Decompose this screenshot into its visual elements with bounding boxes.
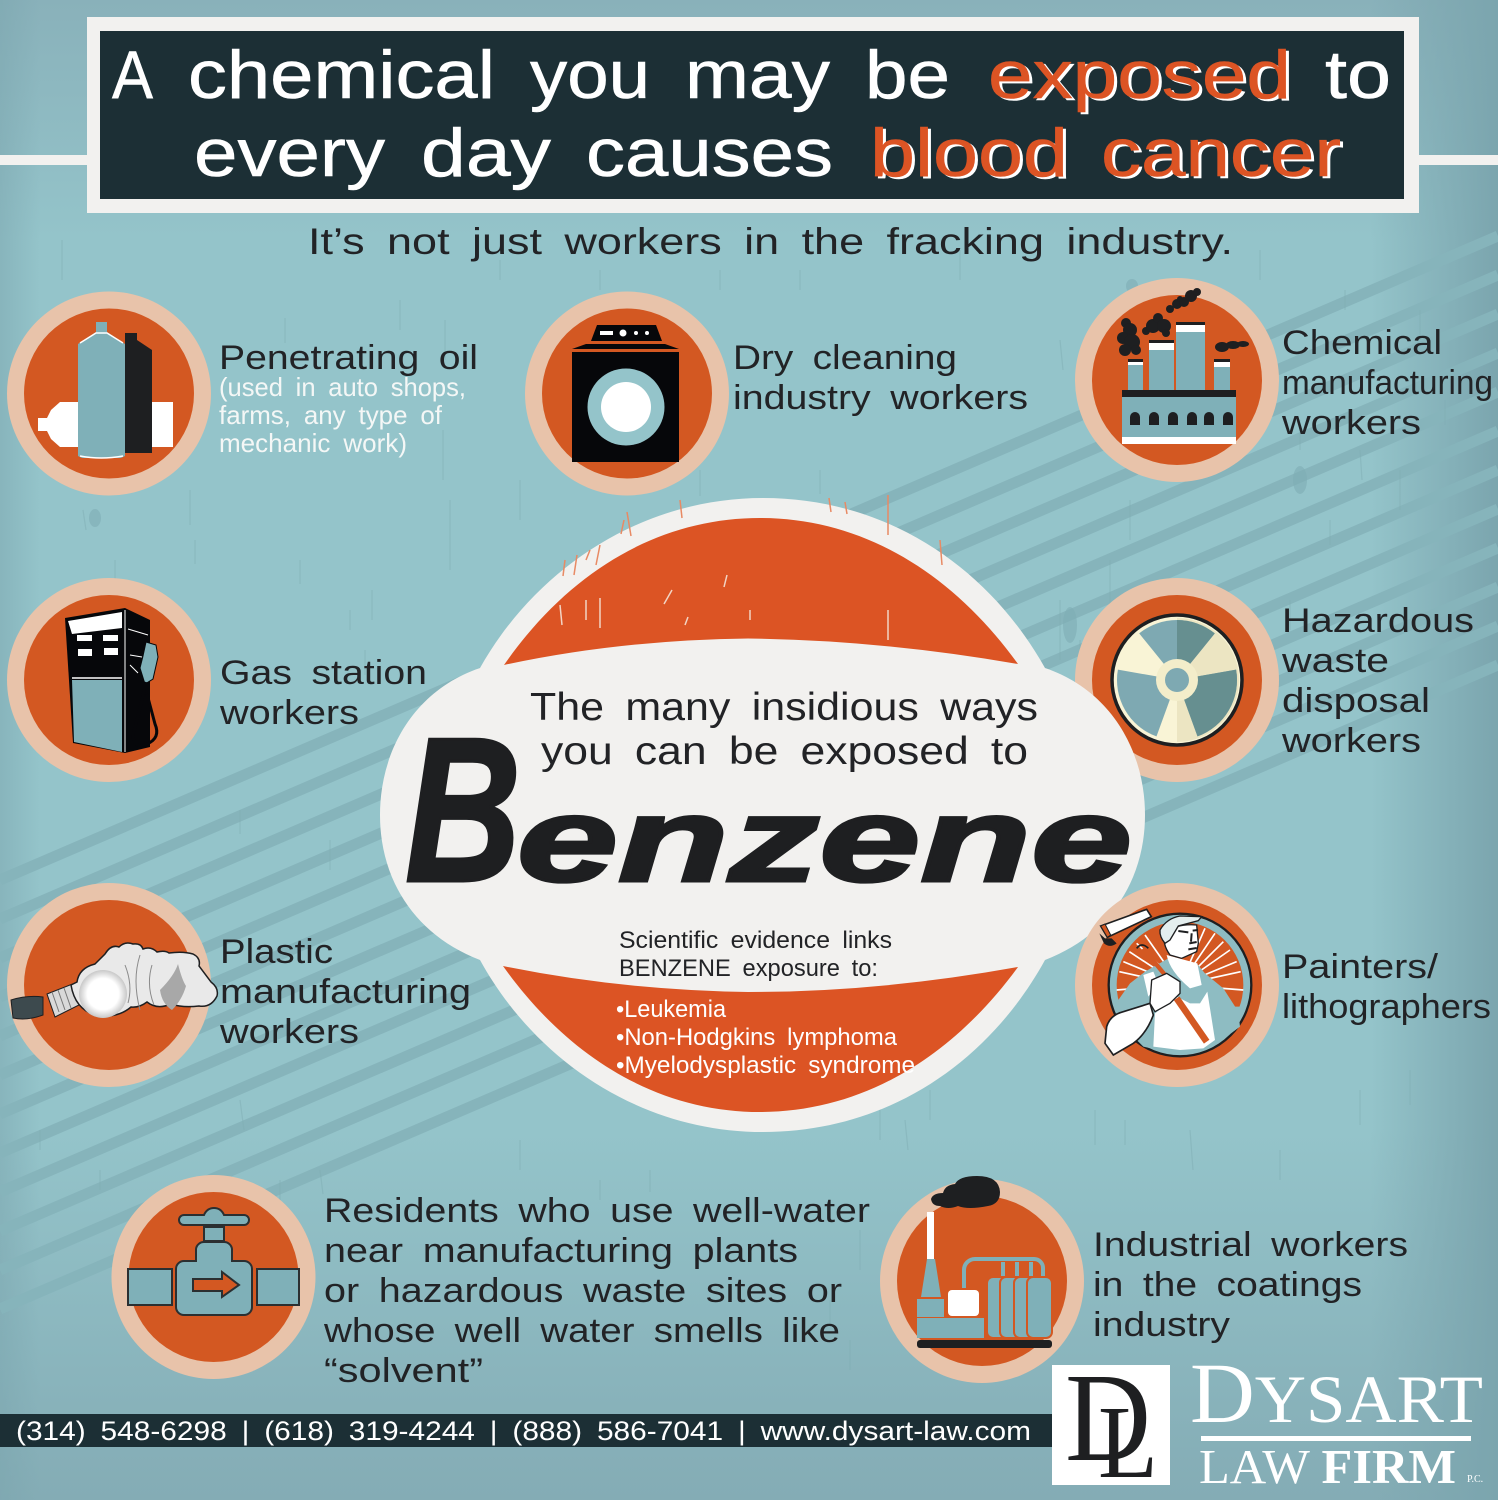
badge <box>525 292 729 496</box>
label: industry <box>1093 1306 1230 1344</box>
heading: you can be exposed to <box>541 730 1028 773</box>
label: in the coatings <box>1093 1266 1362 1304</box>
monogram: D <box>1065 1349 1151 1488</box>
label: lithographers <box>1282 988 1491 1026</box>
panel: painters <box>1075 883 1491 1087</box>
title line 1 <box>112 37 1391 113</box>
panel: penetrating oil <box>7 292 478 496</box>
label: manufacturing <box>1282 364 1493 402</box>
title line 2: day <box>421 115 551 191</box>
label <box>219 654 427 732</box>
title banner <box>87 17 1419 213</box>
disease list: •Non-Hodgkins lymphoma <box>616 1024 898 1051</box>
title line 2: every <box>194 115 385 191</box>
panel: well water residents <box>112 1175 870 1390</box>
label <box>219 339 478 458</box>
icon: spray cans <box>38 322 173 458</box>
top orange cap <box>504 518 1018 665</box>
panel: hazardous waste <box>1075 578 1474 782</box>
label <box>1282 948 1491 1026</box>
panel: plastic manufacturing <box>7 883 471 1087</box>
title line 2: cancer <box>1101 115 1341 191</box>
label <box>219 933 471 1051</box>
evidence text: BENZENE exposure to: <box>619 955 878 982</box>
decorative side rules of the title banner <box>0 155 1498 165</box>
title line 1: be <box>865 37 950 113</box>
title line 2 <box>194 115 1341 191</box>
icon: industrial plant <box>917 1176 1052 1348</box>
panel: chemical manufacturing <box>1075 278 1493 482</box>
label: workers <box>219 1013 359 1051</box>
label: Penetrating oil <box>219 339 478 377</box>
badge <box>7 578 211 782</box>
firm name <box>1190 1345 1483 1494</box>
medallion shape <box>380 498 1145 1132</box>
label: waste <box>1281 642 1389 680</box>
label: industry workers <box>733 379 1028 417</box>
heading <box>530 686 1038 773</box>
icon: crushed plastic bottle <box>11 943 217 1019</box>
label: Residents who use well-water <box>324 1192 870 1230</box>
subheading: It’s not just workers in the fracking industry. <box>308 221 1233 262</box>
title line 1: A <box>112 37 154 113</box>
label: farms, any type of <box>219 400 443 430</box>
title line 2: blood <box>870 115 1068 191</box>
disease list <box>616 996 915 1079</box>
label: Gas station <box>220 654 427 692</box>
heading: The many insidious ways <box>530 686 1038 729</box>
label: workers <box>1281 404 1421 442</box>
label <box>1281 324 1493 442</box>
label <box>1281 602 1474 760</box>
monogram: L <box>1098 1385 1158 1500</box>
disease list: •Myelodysplastic syndrome <box>616 1052 915 1079</box>
badge <box>1075 278 1279 482</box>
panel: gas station <box>7 578 427 782</box>
logo: Dysart Law Firm <box>1052 1345 1483 1500</box>
title line 1: to <box>1325 37 1391 113</box>
badge <box>7 883 211 1087</box>
label: near manufacturing plants <box>324 1232 798 1270</box>
label <box>323 1192 870 1390</box>
worn scratches <box>563 495 942 576</box>
badge <box>1075 883 1279 1087</box>
icon: radiation symbol <box>1112 615 1242 745</box>
contact bar: (314) 548-6298 | (618) 319-4244 | (888) 586-7041 | www.dysart-law.com <box>16 1416 1031 1446</box>
white right margin <box>1498 0 1507 1500</box>
title line 1: you <box>530 37 650 113</box>
label <box>1093 1226 1408 1344</box>
icon: washing machine <box>572 325 679 462</box>
evidence text <box>619 927 892 982</box>
panel: dry cleaning <box>525 292 1028 496</box>
label: mechanic work) <box>219 428 407 458</box>
title line 1: may <box>685 37 830 113</box>
label: workers <box>1281 722 1421 760</box>
evidence text: Scientific evidence links <box>619 927 892 954</box>
label: manufacturing <box>220 973 471 1011</box>
icon: pipe valve <box>128 1208 299 1315</box>
label: or hazardous waste sites or <box>324 1272 842 1310</box>
Benzene wordmark <box>405 695 1132 925</box>
label: Chemical <box>1282 324 1442 362</box>
icon: factory <box>1117 288 1249 444</box>
label: Dry cleaning <box>733 339 957 377</box>
badge <box>880 1179 1084 1383</box>
firm name: LAW FIRM <box>1199 1439 1456 1494</box>
badge <box>7 292 211 496</box>
badge <box>112 1175 316 1379</box>
Benzene wordmark: B <box>405 695 521 925</box>
title line 1: chemical <box>188 37 495 113</box>
icon: painter with roller <box>1099 909 1251 1056</box>
label: “solvent” <box>324 1352 483 1390</box>
label <box>733 339 1028 417</box>
label: Plastic <box>220 933 333 971</box>
label: disposal <box>1282 682 1430 720</box>
panel: central benzene medallion <box>380 495 1145 1132</box>
disease list: •Leukemia <box>616 996 727 1023</box>
label: whose well water smells like <box>323 1312 840 1350</box>
Benzene wordmark: enzene <box>517 773 1132 907</box>
label: Industrial workers <box>1093 1226 1408 1264</box>
label: (used in auto shops, <box>219 372 466 402</box>
panel: coatings industry <box>880 1176 1408 1383</box>
label: Painters/ <box>1282 948 1439 986</box>
firm name: P.C. <box>1467 1474 1483 1485</box>
label: workers <box>219 694 359 732</box>
icon: gas pump <box>65 608 158 753</box>
label: Hazardous <box>1282 602 1474 640</box>
title line 2: causes <box>586 115 833 191</box>
firm name: DYSART <box>1190 1345 1483 1441</box>
badge <box>1075 578 1279 782</box>
title line 1: exposed <box>988 37 1291 113</box>
bottom orange cap <box>503 966 1018 1112</box>
